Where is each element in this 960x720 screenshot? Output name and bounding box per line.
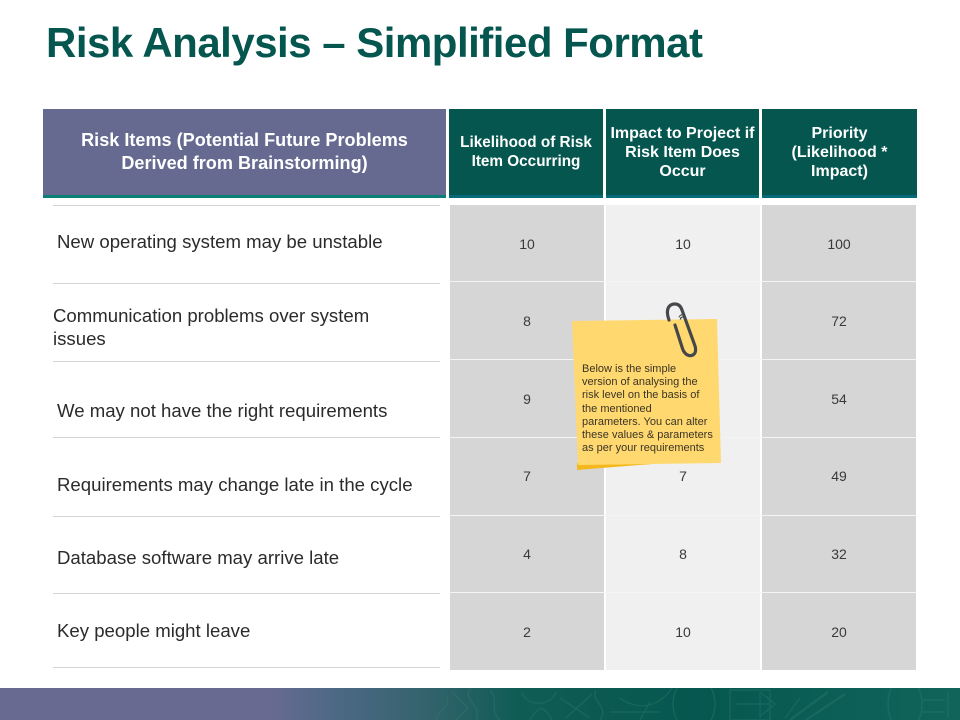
header: priority: [762, 109, 917, 198]
risk item 6: Key people might leave: [57, 620, 250, 641]
values grid: 10: [675, 624, 691, 640]
values grid: [519, 236, 851, 640]
values grid: 20: [831, 624, 847, 640]
values grid: 9: [523, 391, 531, 407]
values grid: 72: [831, 313, 847, 329]
header: priority: Impact): [811, 162, 868, 180]
header: likelihood: Likelihood of Risk: [460, 134, 592, 151]
note text: version of analysing the: [582, 376, 698, 388]
header: priority: (Likelihood *: [792, 144, 888, 160]
note text: Below is the simple: [582, 363, 676, 375]
column: likelihood: [450, 205, 604, 670]
header: risk items: Derived from Brainstorming): [121, 153, 368, 173]
header: impact: Impact to Project if: [610, 124, 755, 142]
note text: the mentioned: [582, 403, 652, 415]
footer band: [0, 688, 960, 720]
header: impact: [606, 109, 759, 198]
risk item 1: New operating system may be unstable: [57, 231, 383, 252]
values grid: 10: [675, 236, 691, 252]
header: likelihood: [449, 109, 603, 198]
header: risk items: Risk Items (Potential Future Problems: [81, 130, 408, 150]
values grid: 9: [679, 313, 687, 329]
risk item 4: Requirements may change late in the cycle: [57, 474, 413, 495]
values grid: 32: [831, 546, 847, 562]
header: priority: Priority: [811, 124, 868, 142]
title: Risk Analysis – Simplified Format: [46, 19, 702, 66]
values grid: 7: [679, 468, 687, 484]
risk item 2: issues: [53, 328, 106, 349]
values grid: 2: [523, 624, 531, 640]
icon: paperclip: [667, 304, 696, 356]
note text: [582, 363, 713, 454]
note text: as per your requirements: [582, 442, 704, 454]
header: likelihood: Item Occurring: [472, 153, 580, 170]
values grid: 4: [523, 546, 531, 562]
sticky note: [572, 302, 721, 470]
values grid: 10: [519, 236, 535, 252]
header: impact: Occur: [659, 162, 706, 180]
column: priority: [762, 205, 916, 670]
risk item 2: [53, 305, 369, 349]
risk item 5: Database software may arrive late: [57, 547, 339, 568]
risk item 2: Communication problems over system: [53, 305, 369, 326]
risk items list: [53, 205, 440, 668]
note text: risk level on the basis of: [582, 389, 699, 401]
header: impact: Risk Item Does: [625, 144, 740, 160]
note text: parameters. You can alter: [582, 416, 707, 428]
values grid: 8: [523, 313, 531, 329]
values grid: 8: [679, 546, 687, 562]
header: risk items: [43, 109, 446, 198]
note text: these values & parameters: [582, 429, 713, 441]
values grid: 6: [679, 391, 687, 407]
values grid: 54: [831, 391, 847, 407]
values grid: 100: [827, 236, 851, 252]
risk item 3: We may not have the right requirements: [57, 400, 387, 421]
footer pattern: [436, 677, 948, 720]
values grid: 49: [831, 468, 847, 484]
column: impact: [606, 205, 760, 670]
values grid: 7: [523, 468, 531, 484]
